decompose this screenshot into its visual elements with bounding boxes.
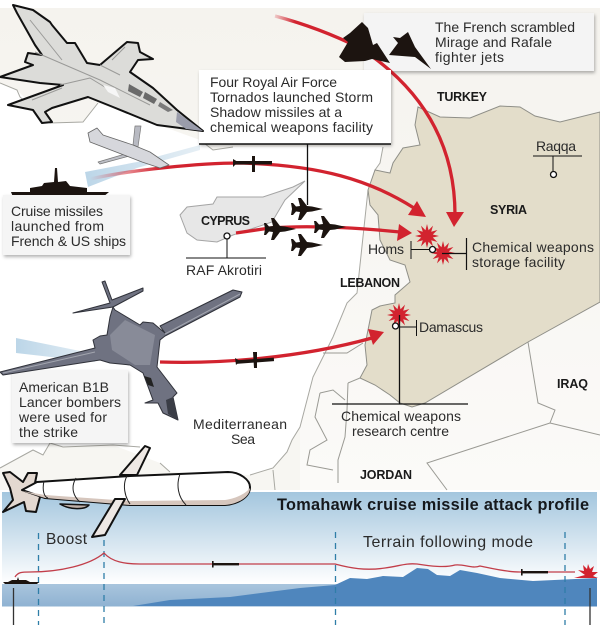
label: Raqqa: Raqqa — [536, 138, 576, 154]
label: Lebanon: LEBANON — [340, 276, 400, 290]
panel: cruise missile callout: French & US ships — [11, 233, 126, 249]
arrow: French jets path — [275, 16, 464, 227]
label: Cyprus and RAF Akrotiri: RAF Akrotiri — [186, 262, 262, 278]
panel: RAF Tornado callout: Tornados launched Storm — [210, 89, 373, 105]
illustration: B1B Lancer bomber — [0, 281, 242, 420]
icon: missile profile two — [521, 569, 548, 576]
label: Raqqa — [533, 138, 582, 178]
panel: RAF Tornado callout: chemical weapons facility — [210, 119, 373, 135]
label: Cyprus and RAF Akrotiri — [186, 214, 266, 278]
icon: French Rafale jet — [389, 32, 431, 69]
label: Damascus — [392, 319, 483, 336]
panel: RAF Tornado callout — [199, 70, 391, 144]
map background — [0, 8, 600, 492]
label: Jordan: JORDAN — [360, 468, 412, 482]
panel: French jets callout: The French scrambled — [435, 19, 575, 35]
leader: Tornado callout to jets — [306, 144, 308, 205]
illustration: Tomahawk missile — [3, 446, 250, 537]
strike burst: Damascus — [387, 303, 411, 327]
label: chemical weapons research centre: Chemical weapons — [341, 408, 461, 424]
panel: French jets callout — [364, 13, 594, 71]
map: Cyprus — [180, 181, 305, 242]
panel: Tomahawk attack profile — [2, 492, 598, 625]
terrain — [133, 568, 597, 606]
icon: missile profile one — [212, 561, 239, 568]
label: boost: Boost — [46, 531, 88, 548]
icon: missile on bomber path — [235, 352, 274, 368]
strike burst: Homs north — [415, 224, 439, 248]
label: Iraq: IRAQ — [557, 377, 588, 391]
label: chemical weapons research centre: research centre — [352, 423, 449, 439]
title: Tomahawk cruise missile attack profile — [277, 496, 589, 514]
panel: cruise missile callout — [3, 195, 130, 255]
icon: target burst — [574, 564, 598, 578]
country borders — [307, 342, 600, 490]
phase divider lines — [38, 532, 565, 625]
label: chemical weapons storage facility: Chemical weapons — [472, 239, 594, 255]
label: Syria: SYRIA — [490, 203, 527, 217]
panel: B1B callout: the strike — [19, 424, 78, 440]
label: Homs — [368, 241, 436, 259]
illustration: Storm Shadow missile — [88, 126, 169, 168]
panel: RAF Tornado callout: Four Royal Air Force — [210, 74, 337, 90]
label: chemical weapons research centre — [332, 315, 468, 439]
label: Damascus: Damascus — [419, 319, 483, 335]
panel: B1B callout: Lancer bombers — [19, 394, 121, 410]
panel: B1B callout: were used for — [18, 409, 107, 425]
illustration: Tornado jet — [0, 5, 203, 131]
arrow: RAF Tornado path — [236, 224, 412, 241]
panel: French jets callout: fighter jets — [435, 49, 504, 65]
start and target marker lines — [14, 588, 590, 625]
panel: B1B callout: American B1B — [19, 379, 109, 395]
arrow: cruise missile path — [90, 163, 426, 217]
label: Turkey: TURKEY — [437, 90, 488, 104]
country: Syria — [360, 106, 600, 407]
label: Mediterranean Sea: Mediterranean — [193, 416, 287, 432]
panel: cruise missile callout: launched from — [11, 218, 104, 234]
icon: warship silhouette — [11, 168, 109, 197]
panel: RAF Tornado callout: Shadow missiles at a — [210, 104, 342, 120]
B1B trail — [16, 338, 95, 362]
arrow: B1B bomber path — [160, 329, 384, 362]
panel: B1B callout — [12, 370, 128, 443]
icon: missile on cruise path — [233, 156, 272, 172]
label: terrain following mode: Terrain following mode — [363, 534, 533, 551]
label: Mediterranean Sea — [193, 416, 287, 447]
icon: French Mirage jet — [339, 22, 390, 63]
flight path — [15, 553, 575, 577]
label: chemical weapons storage facility — [442, 238, 594, 270]
icon: ship launch — [3, 577, 39, 584]
icon: RAF Tornado formation — [264, 198, 346, 256]
label: Homs: Homs — [368, 241, 404, 257]
label: Cyprus and RAF Akrotiri: CYPRUS — [201, 214, 250, 228]
Tornado missile trail — [85, 145, 200, 187]
panel: French jets callout: Mirage and Rafale — [435, 34, 552, 50]
label: Mediterranean Sea: Sea — [231, 431, 255, 447]
strike burst: storage facility — [431, 241, 455, 265]
panel: cruise missile callout: Cruise missiles — [11, 203, 103, 219]
label: chemical weapons storage facility: storage facility — [472, 254, 565, 270]
